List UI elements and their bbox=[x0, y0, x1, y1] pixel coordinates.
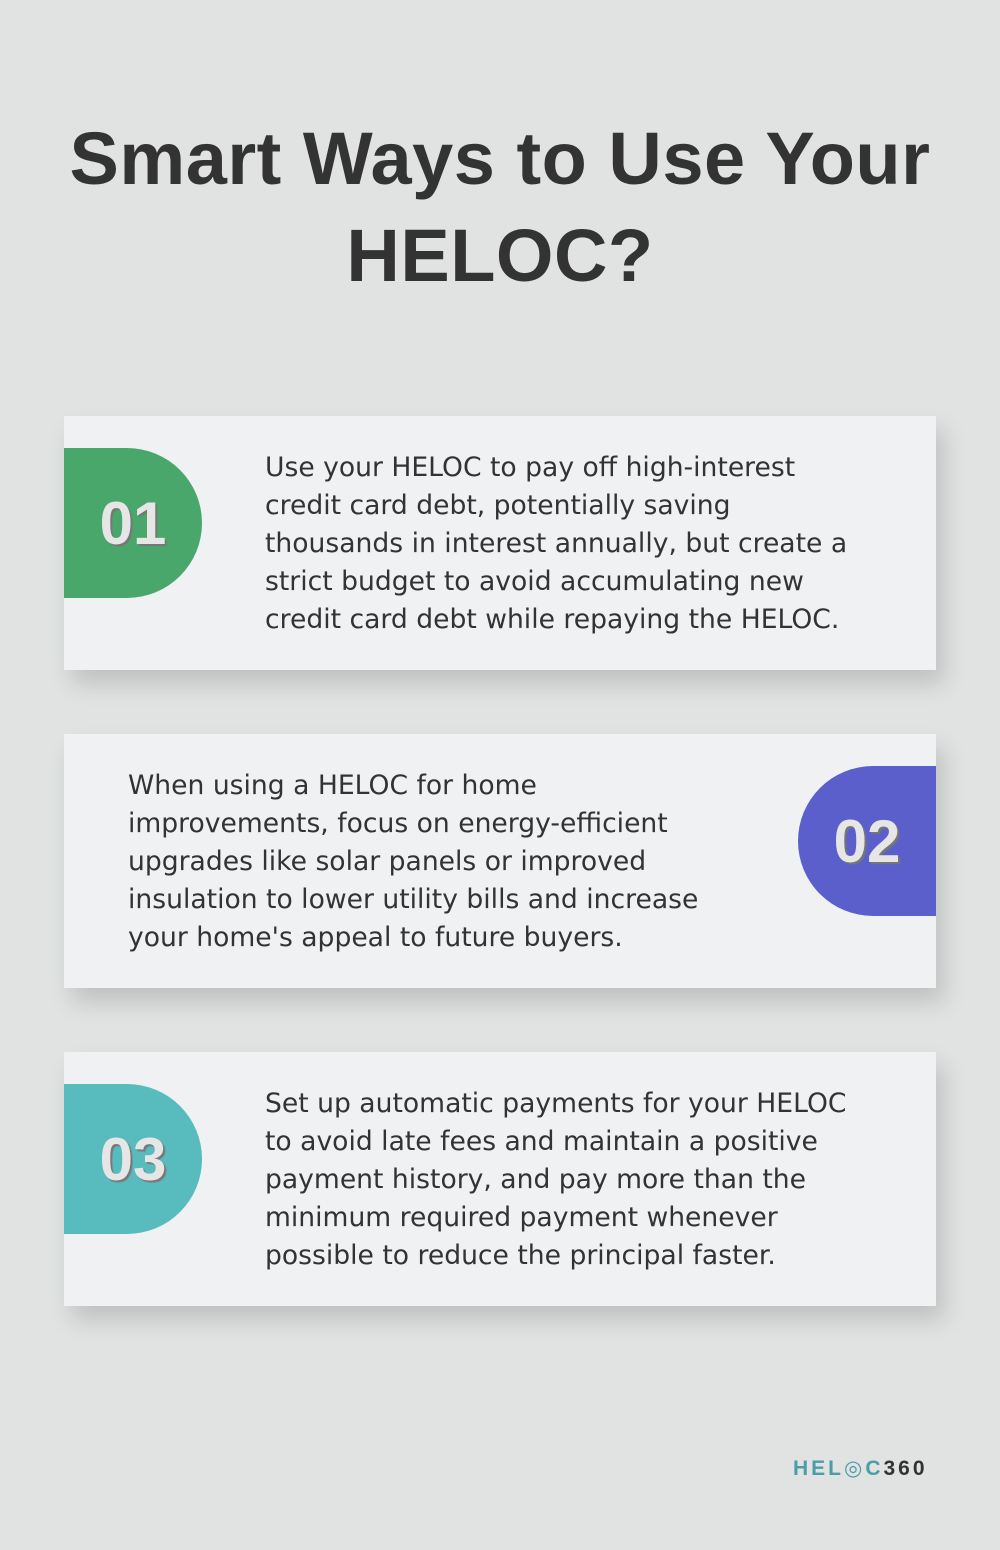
text block 3 bbox=[265, 1088, 846, 1271]
text block 2: When using a HELOC for home bbox=[128, 770, 537, 801]
text block 1: strict budget to avoid accumulating new bbox=[265, 566, 804, 597]
text block 2 bbox=[128, 770, 698, 953]
badge 01: 01 bbox=[100, 490, 166, 556]
text block 3: possible to reduce the principal faster. bbox=[265, 1240, 776, 1271]
text block 3: Set up automatic payments for your HELOC bbox=[265, 1088, 846, 1119]
text block 3: to avoid late fees and maintain a positive bbox=[265, 1126, 818, 1157]
title: HELOC? bbox=[346, 214, 654, 297]
text block 2: your home's appeal to future buyers. bbox=[128, 922, 623, 953]
badge 03: 03 bbox=[100, 1126, 166, 1192]
panel: card 2 bbox=[64, 734, 936, 988]
text block 3: payment history, and pay more than the bbox=[265, 1164, 806, 1195]
text block 2: improvements, focus on energy-efficient bbox=[128, 808, 668, 839]
logo: HEL◎C360 bbox=[793, 1457, 928, 1480]
text block 1: credit card debt, potentially saving bbox=[265, 490, 731, 521]
badge 02 bbox=[798, 766, 936, 916]
title: Smart Ways to Use Your bbox=[70, 117, 930, 200]
text block 3: minimum required payment whenever bbox=[265, 1202, 778, 1233]
text block 1 bbox=[265, 452, 847, 635]
badge 02: 02 bbox=[834, 808, 900, 874]
panel: card 3 bbox=[64, 1052, 936, 1306]
text block 2: upgrades like solar panels or improved bbox=[128, 846, 646, 877]
badge 03 bbox=[64, 1084, 202, 1234]
text block 1: thousands in interest annually, but create a bbox=[265, 528, 847, 559]
text block 2: insulation to lower utility bills and increase bbox=[128, 884, 698, 915]
text block 1: Use your HELOC to pay off high-interest bbox=[265, 452, 795, 483]
panel: card 1 bbox=[64, 416, 936, 670]
badge 01 bbox=[64, 448, 202, 598]
text block 1: credit card debt while repaying the HELOC. bbox=[265, 604, 839, 635]
title bbox=[70, 117, 930, 297]
